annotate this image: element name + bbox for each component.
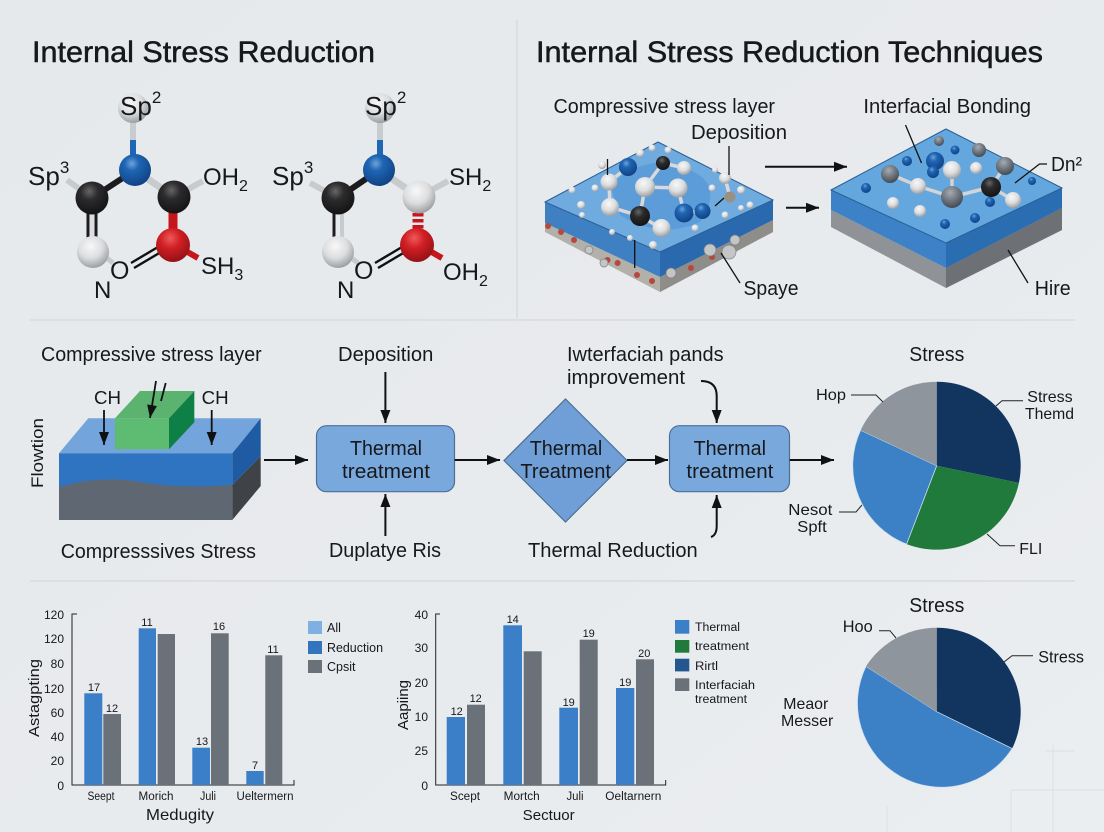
flow box: thermal treatment 2: Thermal bbox=[694, 438, 766, 460]
bar chart: Medugity: 17 bbox=[88, 682, 100, 694]
bar chart: Sectuor: Juli bbox=[566, 791, 584, 803]
bar chart: Medugity: 80 bbox=[51, 657, 64, 671]
legend: second bar chart: treatment bbox=[695, 641, 750, 653]
pie chart: stress upper: Spft bbox=[797, 519, 827, 536]
arrow: deposition down bbox=[384, 372, 386, 423]
bar chart: Sectuor bbox=[395, 608, 755, 824]
label: OH2: 2 bbox=[479, 273, 488, 290]
legend: first bar chart: Reduction bbox=[327, 641, 383, 655]
molecule diagram: left bbox=[28, 88, 248, 304]
label: Sp3: Sp bbox=[272, 161, 304, 191]
flow diamond: thermal treatment bbox=[504, 399, 627, 522]
illustration: layered block bbox=[59, 381, 261, 520]
bar chart: Sectuor: 12 bbox=[451, 706, 463, 718]
bar chart: Medugity: Juli bbox=[200, 791, 216, 803]
label: OH2: OH bbox=[443, 259, 479, 286]
label: N: N bbox=[337, 277, 354, 304]
label: Spaye: Spaye bbox=[744, 278, 798, 300]
label: N: N bbox=[94, 277, 111, 304]
arrow: reduction curve up bbox=[711, 495, 717, 537]
label: SH2: SH bbox=[449, 164, 482, 191]
label: Sp2 top: 2 bbox=[397, 88, 406, 107]
arrow: plate to plate lower bbox=[786, 207, 819, 209]
bar chart: Medugity: 120 bbox=[44, 608, 64, 622]
bar chart: Medugity: 16 bbox=[213, 621, 225, 633]
label: Interfacial Bonding: Interfacial Bonding bbox=[863, 96, 1031, 118]
bar chart: Sectuor: 19 bbox=[583, 628, 595, 640]
bar chart: Medugity: 20 bbox=[51, 754, 64, 768]
bar chart: Medugity: Morich bbox=[138, 791, 174, 803]
legend: second bar chart: treatment bbox=[695, 694, 748, 706]
label: SH3: SH bbox=[201, 253, 234, 280]
label: Iwterfaciah pands improvement: improvement bbox=[567, 367, 685, 389]
bar chart: Medugity: Medugity bbox=[146, 807, 214, 824]
title: Internal Stress Reduction Techniques: Internal Stress Reduction Techniques bbox=[536, 36, 1043, 69]
label: Flowtion: Flowtion bbox=[28, 418, 47, 488]
legend: second bar chart: Thermal bbox=[695, 622, 740, 634]
bar chart: Medugity: 12 bbox=[106, 703, 118, 715]
pie chart: stress lower: Hoo bbox=[843, 618, 873, 636]
pie chart: stress lower: Stress bbox=[1038, 648, 1084, 666]
pie chart: stress upper: Themd bbox=[1025, 406, 1074, 423]
label: Hire: Hire bbox=[1035, 278, 1071, 300]
bar chart: Medugity: 13 bbox=[196, 736, 208, 748]
flow diamond: thermal treatment: Thermal bbox=[530, 438, 602, 460]
bar chart: Sectuor: 19 bbox=[619, 677, 631, 689]
flow diamond: thermal treatment: Treatment bbox=[520, 461, 611, 483]
pie chart: stress lower: Messer bbox=[781, 713, 834, 730]
arrow: box to diamond bbox=[455, 459, 500, 461]
bar chart: Sectuor: 20 bbox=[415, 676, 428, 690]
bar chart: Sectuor: 0 bbox=[421, 779, 428, 793]
pie chart: stress upper: Hop bbox=[816, 387, 846, 404]
label: Iwterfaciah pands improvement: Iwterfaciah pands bbox=[567, 344, 724, 366]
label: Deposition (flow): Deposition bbox=[338, 344, 433, 366]
label: CH right: CH bbox=[202, 388, 229, 408]
legend: second bar chart bbox=[675, 620, 755, 706]
pie chart: stress lower bbox=[781, 595, 1084, 787]
bar chart: Medugity bbox=[26, 608, 383, 824]
molecule diagram: right bbox=[272, 88, 491, 304]
bar chart: Medugity: 11 bbox=[141, 617, 153, 629]
label: Compressive stress layer (flow): Compressive stress layer bbox=[41, 344, 262, 366]
bar chart: Medugity: 60 bbox=[51, 706, 64, 720]
pie chart: stress lower: Stress bbox=[909, 595, 964, 617]
label: CH left: CH bbox=[94, 388, 121, 408]
label: Dn2: Dn² bbox=[1051, 154, 1082, 176]
label: Sp3: Sp bbox=[28, 161, 60, 191]
legend: second bar chart: Rirtl bbox=[695, 661, 718, 673]
bar chart: Medugity: 120 bbox=[44, 682, 64, 696]
legend: first bar chart: All bbox=[327, 621, 341, 635]
arrow: duplicate up bbox=[384, 494, 386, 536]
label: SH3: 3 bbox=[234, 267, 243, 284]
flow box: thermal treatment 1: Thermal bbox=[350, 438, 422, 460]
bar chart: Medugity: 7 bbox=[252, 760, 258, 772]
arrow: plate to plate upper bbox=[765, 166, 847, 168]
bar chart: Medugity: 11 bbox=[267, 644, 279, 656]
label: Compresssives Stress: Compresssives Stress bbox=[61, 541, 256, 563]
flow box: thermal treatment 2: treatment bbox=[686, 461, 774, 483]
bar chart: Medugity: Astagpting bbox=[26, 659, 43, 737]
label: Sp3: 3 bbox=[60, 158, 69, 177]
bar chart: Medugity: 120 bbox=[44, 632, 64, 646]
bar chart: Sectuor: 12 bbox=[470, 693, 482, 705]
label: Sp2 top: Sp bbox=[365, 91, 397, 121]
flow box: thermal treatment 1: treatment bbox=[342, 461, 430, 483]
legend: first bar chart bbox=[308, 621, 383, 674]
label: SH2: 2 bbox=[482, 178, 491, 195]
legend: second bar chart: Interfaciah bbox=[695, 680, 755, 692]
bar chart: Sectuor: 19 bbox=[563, 697, 575, 709]
pie chart: stress upper bbox=[788, 344, 1074, 558]
label: Sp3: 3 bbox=[304, 158, 313, 177]
bar chart: Sectuor: 20 bbox=[638, 648, 650, 660]
bar chart: Sectuor: Sectuor bbox=[523, 807, 575, 824]
label: Thermal Reduction: Thermal Reduction bbox=[528, 540, 698, 562]
bar chart: Medugity: Ueltermern bbox=[236, 791, 294, 803]
pie chart: stress lower: Meaor bbox=[783, 696, 829, 713]
illustration: interfacial bonding plate bbox=[831, 125, 1062, 288]
label: Deposition (top): Deposition bbox=[691, 122, 787, 144]
label: OH2: 2 bbox=[239, 178, 248, 195]
label: O: O bbox=[354, 257, 373, 285]
label: O: O bbox=[110, 257, 129, 285]
flow box: thermal treatment 2 bbox=[670, 426, 790, 492]
bar chart: Sectuor: 10 bbox=[415, 710, 428, 724]
pie chart: stress upper: Stress bbox=[1027, 389, 1073, 406]
bar chart: Sectuor: Scept bbox=[450, 791, 481, 803]
bar chart: Sectuor: 25 bbox=[415, 744, 428, 758]
bar chart: Medugity: 40 bbox=[51, 730, 64, 744]
flow box: thermal treatment 1 bbox=[316, 426, 454, 492]
label: Sp2 top: Sp bbox=[120, 91, 152, 121]
arrow: block to first box bbox=[264, 459, 308, 461]
label: OH2: OH bbox=[203, 164, 239, 191]
legend: first bar chart: Cpsit bbox=[327, 660, 356, 674]
label: Sp2 top: 2 bbox=[152, 88, 161, 107]
pie chart: stress upper: Stress bbox=[909, 344, 964, 366]
arrow: interfacial curve down bbox=[701, 381, 717, 423]
pie chart: stress upper: FLI bbox=[1019, 541, 1042, 558]
bar chart: Sectuor: Mortch bbox=[504, 791, 540, 803]
arrow: box to pie bbox=[790, 459, 834, 461]
bar chart: Sectuor: 14 bbox=[507, 614, 519, 626]
label: Compressive stress layer (top): Compressive stress layer bbox=[554, 96, 775, 118]
label: Duplatye Ris: Duplatye Ris bbox=[329, 540, 441, 562]
bar chart: Sectuor: Aapiing bbox=[395, 680, 412, 730]
title: Internal Stress Reduction: Internal Stress Reduction bbox=[32, 36, 375, 69]
bar chart: Medugity: 0 bbox=[57, 779, 64, 793]
bar chart: Sectuor: 30 bbox=[415, 641, 428, 655]
bar chart: Sectuor: Oeltarnern bbox=[605, 791, 661, 803]
illustration: compressive stress layer plate bbox=[545, 142, 773, 292]
bar chart: Medugity: Seept bbox=[88, 791, 115, 803]
pie chart: stress upper: Nesot bbox=[788, 502, 833, 519]
bar chart: Sectuor: 40 bbox=[415, 608, 428, 622]
arrow: diamond to box bbox=[627, 459, 668, 461]
